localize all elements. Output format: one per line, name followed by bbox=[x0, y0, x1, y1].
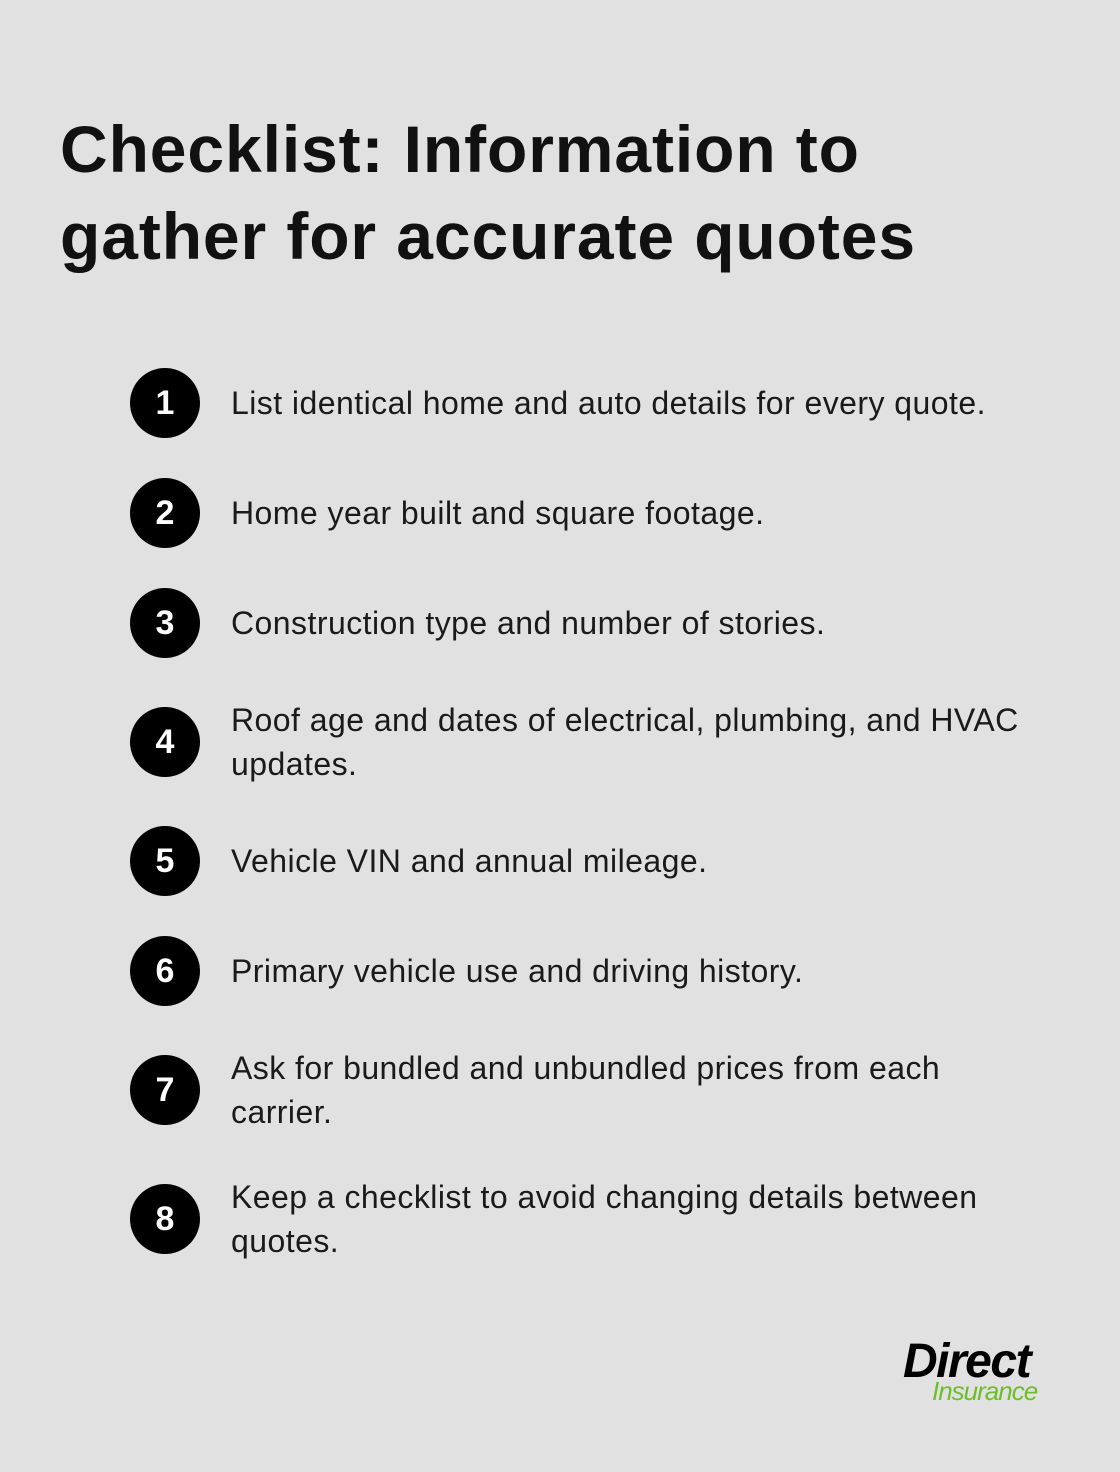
item 7: Ask for bundled and unbundled prices from each carrier. bbox=[231, 1050, 940, 1130]
item 8: Keep a checklist to avoid changing details between quotes. bbox=[231, 1179, 978, 1259]
item 6: Primary vehicle use and driving history. bbox=[231, 953, 803, 989]
item 1 bbox=[130, 368, 986, 438]
item 6 bbox=[130, 936, 803, 1006]
item 2: 2 bbox=[156, 494, 174, 532]
item 6: 6 bbox=[156, 952, 174, 990]
item 3: Construction type and number of stories. bbox=[231, 605, 825, 641]
item 5: 5 bbox=[156, 842, 174, 880]
title: Checklist: Information to bbox=[60, 112, 860, 186]
item 5 bbox=[130, 826, 707, 896]
logo: Insurance bbox=[932, 1376, 1037, 1406]
item 3 bbox=[130, 588, 825, 658]
item 1: 1 bbox=[156, 384, 174, 422]
logo: Direct bbox=[903, 1335, 1030, 1388]
item 5: Vehicle VIN and annual mileage. bbox=[231, 843, 707, 879]
item 2: Home year built and square footage. bbox=[231, 495, 764, 531]
item 2 bbox=[130, 478, 764, 548]
item 4: 4 bbox=[156, 723, 174, 761]
item 1: List identical home and auto details for every quote. bbox=[231, 385, 986, 421]
item 7: 7 bbox=[156, 1071, 174, 1109]
title: gather for accurate quotes bbox=[60, 199, 916, 273]
title bbox=[60, 112, 916, 273]
item 8: 8 bbox=[156, 1200, 174, 1238]
item 3: 3 bbox=[156, 604, 174, 642]
item 4: Roof age and dates of electrical, plumbing, and HVAC updates. bbox=[231, 702, 1019, 782]
